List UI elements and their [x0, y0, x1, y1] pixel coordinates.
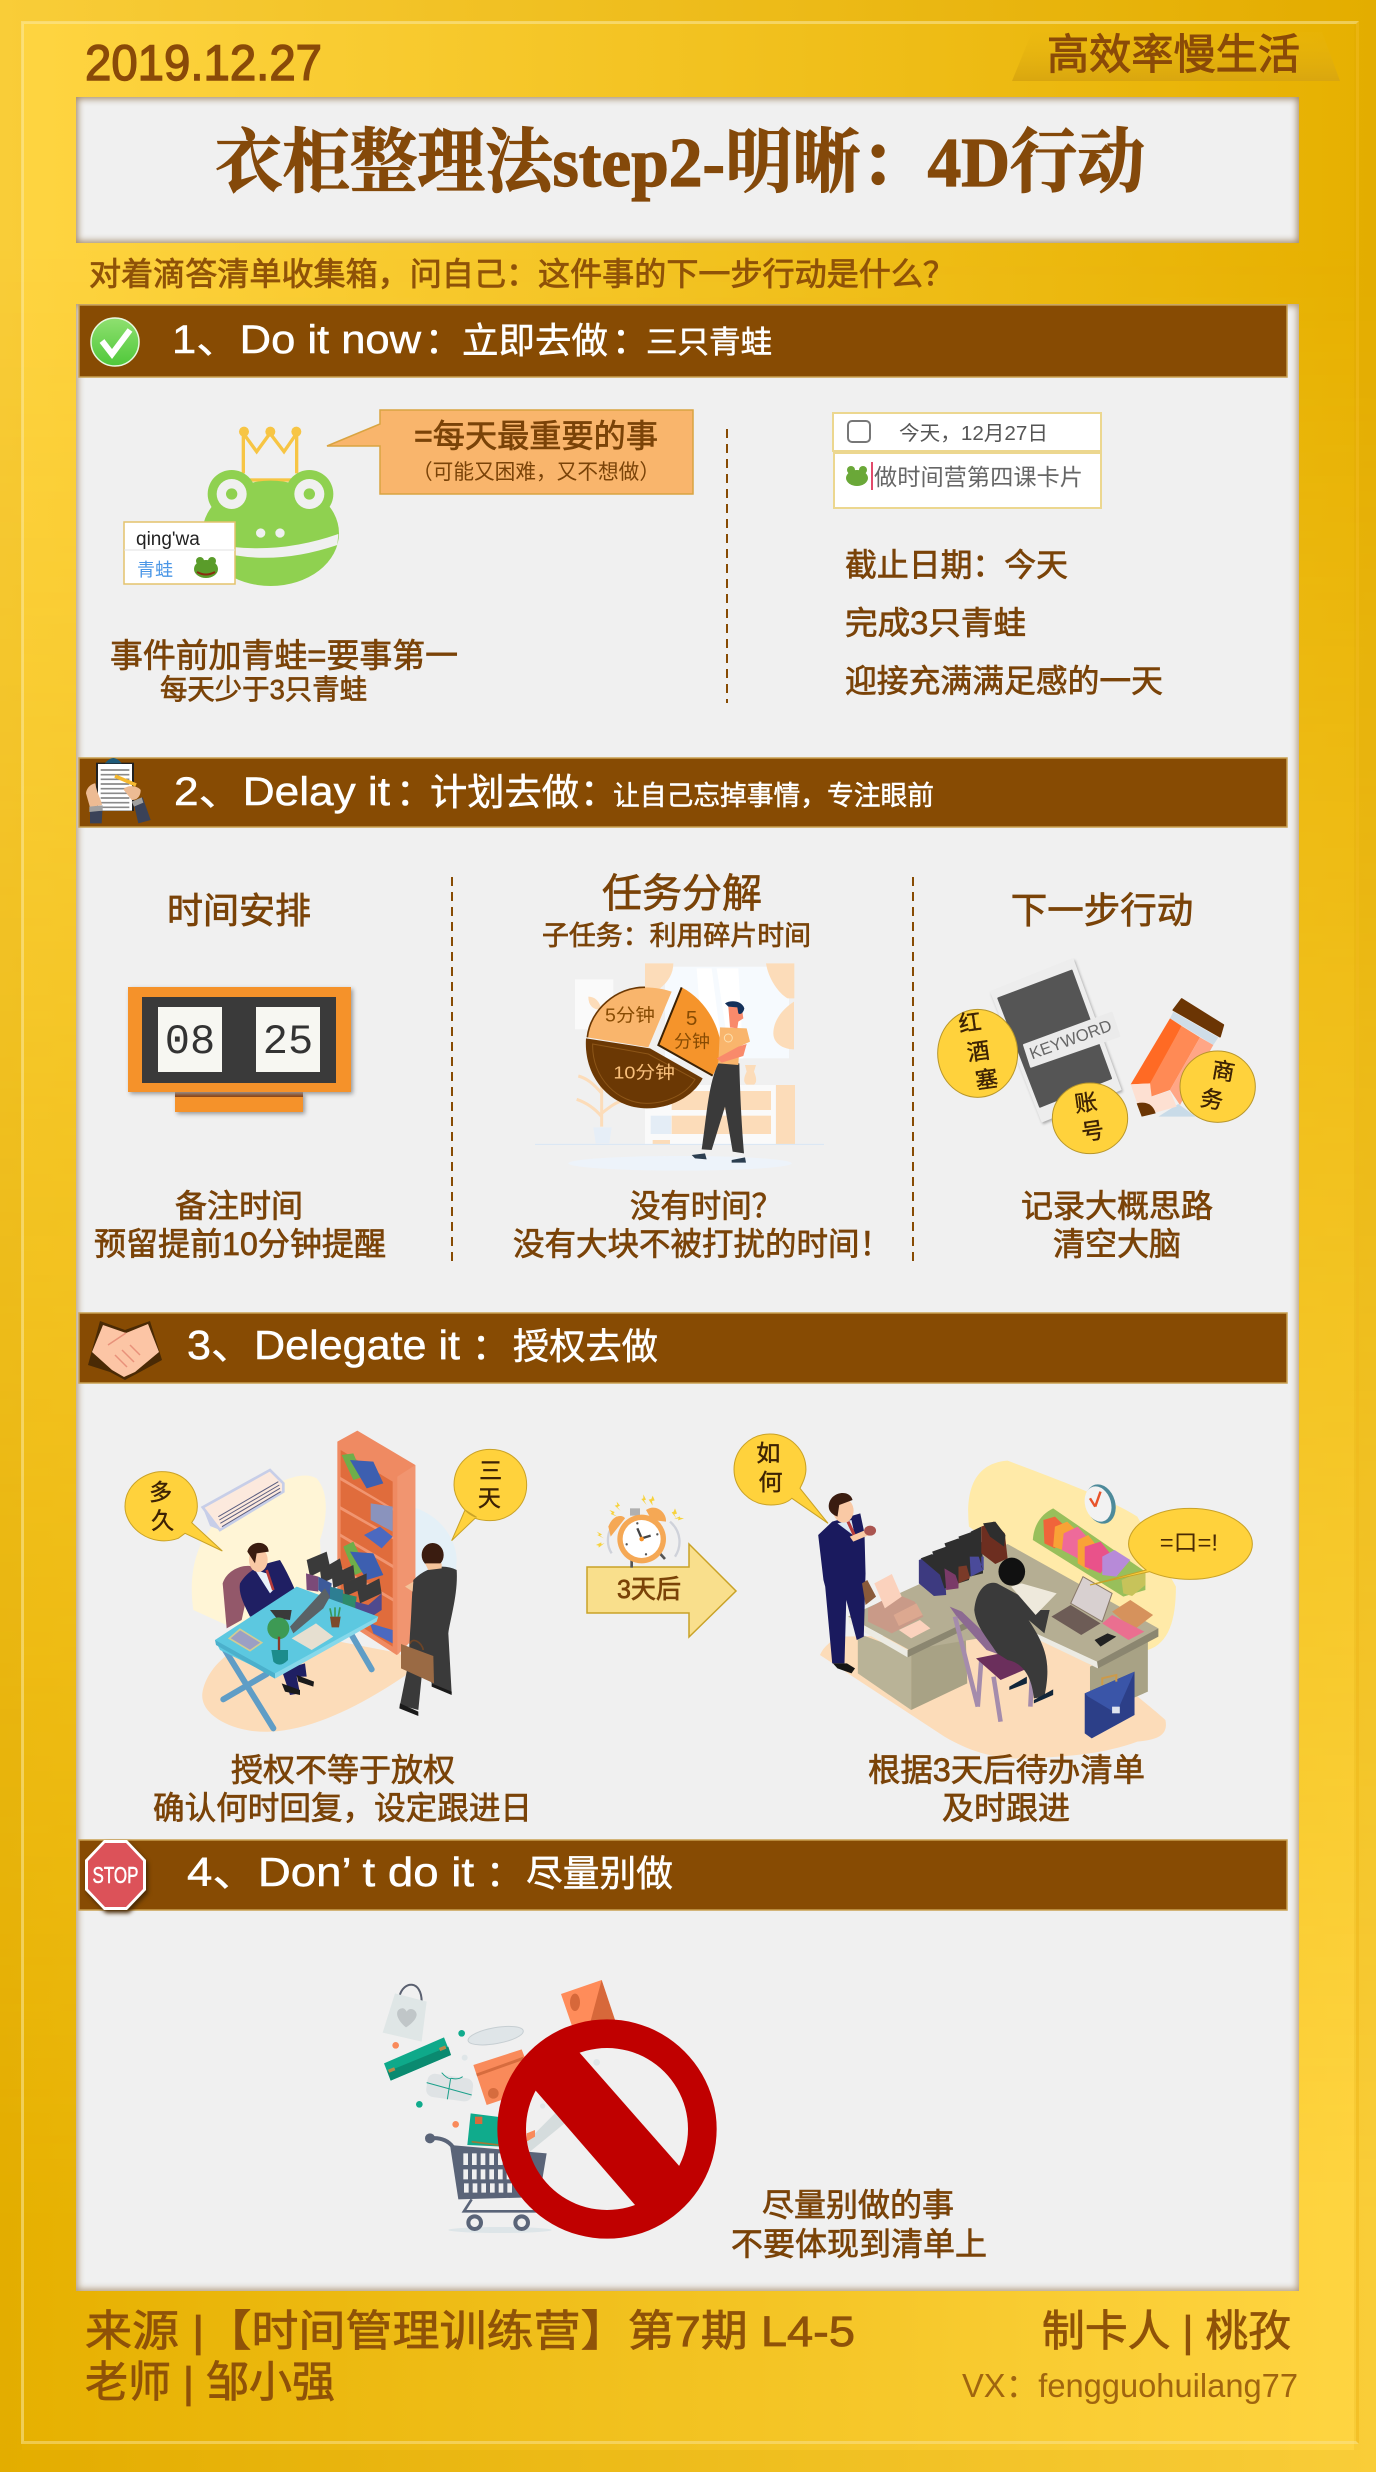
pie: 5 minutes orange: 5	[686, 1007, 697, 1030]
section 1 heading	[172, 318, 772, 362]
files on right desk	[919, 1522, 1008, 1596]
standing man	[818, 1493, 876, 1673]
backdrop blobs	[820, 1461, 1176, 1759]
section 4 heading: 尽量别做	[526, 1853, 673, 1894]
caption: note time	[94, 1188, 386, 1262]
icon: flip clock: 08	[165, 1018, 215, 1066]
text block: deadline: 迎接充满满足感的一天	[845, 663, 1163, 699]
icon: clipboard	[86, 758, 151, 823]
footer: credit	[962, 2308, 1298, 2404]
person	[692, 1001, 750, 1163]
section 1 heading: 立即去做	[462, 320, 608, 361]
caption: do not list: 不要体现到清单上	[731, 2226, 987, 2262]
bubble: how long: 多	[149, 1479, 172, 1505]
icon: stop sign: STOP	[92, 1862, 138, 1888]
caption: clear mind: 清空大脑	[1053, 1226, 1181, 1262]
floating items	[384, 1980, 615, 2152]
callout: most important thing: （可能又困难，又不想做）	[412, 461, 660, 484]
illustration: notebook, pencil, coins	[938, 958, 1255, 1154]
input box: qingwa: 青蛙	[137, 560, 173, 580]
coin: business: 商	[1210, 1056, 1237, 1086]
illustration: person holding pie chart	[535, 963, 824, 1171]
caption: delegate not abdicate: 确认何时回复，设定跟进日	[153, 1790, 532, 1826]
input box: qingwa: qing'wa	[136, 529, 200, 550]
caption: follow up: 根据3天后待办清单	[868, 1752, 1145, 1788]
icon: green check	[91, 318, 139, 366]
bubble: how: 何	[758, 1470, 783, 1496]
section 1 header bar	[79, 305, 1287, 377]
section 3 heading: 3、Delegate it	[187, 1322, 461, 1368]
coin: business	[1180, 1051, 1255, 1122]
caption: clear mind: 记录大概思路	[1021, 1188, 1213, 1224]
icon: flip clock	[128, 987, 351, 1112]
date: 2019.12.27	[85, 35, 322, 91]
section 2 heading: 计划去做	[430, 772, 579, 813]
pie: 5 minutes light	[587, 987, 672, 1047]
footer: credit: 制卡人 | 桃孜	[1042, 2308, 1291, 2356]
caption: do not list: 尽量别做的事	[762, 2187, 954, 2223]
callout: most important thing: =每天最重要的事	[414, 418, 658, 454]
icon: flip clock: 25	[263, 1018, 313, 1066]
laptop and books	[1051, 1577, 1153, 1647]
bubble: how	[734, 1434, 828, 1523]
task card: 做时间营第四课卡片	[874, 464, 1083, 490]
section 2 heading	[174, 770, 934, 814]
illustration: following up at office	[734, 1434, 1252, 1759]
caption: no time	[513, 1188, 891, 1262]
icon: small frog	[194, 557, 218, 578]
coin: business: 务	[1198, 1085, 1225, 1114]
section 4 heading: 4、Don’ t do it	[187, 1849, 475, 1895]
chair	[950, 1607, 1036, 1722]
subtitle question: 对着滴答清单收集箱，问自己：这件事的下一步行动是什么？	[89, 256, 955, 292]
backdrop blobs	[192, 1475, 457, 1732]
bubble: how: 如	[756, 1441, 780, 1467]
section 1 heading: ：	[425, 320, 461, 361]
pie: 10 minutes: 10分钟	[613, 1062, 675, 1082]
heading: next action: 下一步行动	[1011, 890, 1193, 931]
section 2 heading: ：	[396, 772, 433, 813]
icon: alarm clock	[596, 1494, 684, 1568]
blue desk	[215, 1587, 378, 1728]
arrow: three days later	[587, 1544, 736, 1637]
caption: note time: 预留提前10分钟提醒	[94, 1226, 386, 1262]
briefcase	[1085, 1672, 1135, 1738]
standing man	[399, 1543, 457, 1716]
caption: delegate not abdicate	[153, 1752, 532, 1826]
bubble: how long	[125, 1472, 222, 1551]
cart	[425, 2133, 552, 2233]
section 4 heading: ：	[486, 1853, 522, 1894]
section 1 heading: 三只青蛙	[646, 325, 772, 360]
task card: 今天，12月27日	[899, 422, 1048, 445]
footer: source and teacher	[85, 2308, 855, 2407]
caption: note time: 备注时间	[175, 1188, 303, 1224]
caption: follow up: 及时跟进	[942, 1790, 1070, 1826]
input box: qingwa	[124, 522, 235, 584]
caption: no time: 没有时间？	[630, 1188, 782, 1224]
bubble: how long: 久	[151, 1507, 174, 1533]
room background	[535, 963, 824, 1171]
heading: task breakdown: 子任务：利用碎片时间	[542, 921, 811, 951]
heading: task breakdown: 任务分解	[602, 872, 762, 916]
text block: deadline	[845, 547, 1163, 699]
bubble: surprised face: =口=!	[1160, 1530, 1218, 1556]
pie: 5 minutes orange	[658, 987, 721, 1076]
notebook	[990, 958, 1122, 1123]
L-shaped desk	[848, 1544, 1158, 1710]
icon: handshake	[88, 1321, 162, 1380]
pie: 5 minutes orange: 分钟	[674, 1031, 710, 1051]
fax machine	[868, 1574, 930, 1638]
caption: frog first: 每天少于3只青蛙	[160, 674, 367, 705]
caption: clear mind	[1021, 1188, 1213, 1262]
section 3 heading: ：	[472, 1326, 508, 1367]
notebook: KEYWORD	[1027, 1016, 1114, 1063]
panel: title background	[76, 97, 1299, 243]
coin: wine stopper: 塞	[974, 1065, 1000, 1094]
task card	[833, 413, 1101, 508]
section 2 heading: 2、Delay it	[174, 770, 390, 814]
pie: 10 minutes	[586, 1038, 703, 1108]
bookcase	[337, 1431, 415, 1655]
seated man	[223, 1543, 314, 1695]
seated man	[974, 1558, 1057, 1703]
title: 衣柜整理法step2-明晰：4D行动	[215, 125, 1145, 202]
caption: frog first: 事件前加青蛙=要事第一	[110, 637, 458, 674]
brand tag: 高效率慢生活	[1047, 31, 1300, 78]
coin: account	[1052, 1083, 1128, 1154]
section 3 heading: 授权去做	[513, 1326, 658, 1367]
illustration: crowned frog	[202, 427, 339, 586]
caption: delegate not abdicate: 授权不等于放权	[231, 1752, 455, 1788]
footer: credit: VX：fengguohuilang77	[962, 2367, 1298, 2404]
section 3 header bar	[79, 1313, 1287, 1383]
pencil	[1131, 999, 1223, 1117]
wall clock	[1081, 1481, 1120, 1527]
caption: no time: 没有大块不被打扰的时间！	[513, 1226, 891, 1262]
section 4 heading	[187, 1849, 673, 1895]
footer: source and teacher: 来源 |【时间管理训练营】第7期 L4-5	[85, 2308, 855, 2356]
divider: column 1	[451, 877, 453, 1262]
illustration: delegating at desk	[125, 1431, 527, 1732]
caption: frog first	[110, 637, 458, 705]
heading: task breakdown	[542, 872, 811, 951]
section 2 heading: ：	[580, 772, 617, 813]
section 1 heading: ：	[612, 320, 648, 361]
icon: stop sign	[85, 1840, 146, 1910]
illustration: shopping items	[383, 1980, 717, 2239]
bubble: surprised face	[1090, 1508, 1252, 1585]
coin: wine stopper	[938, 1008, 1018, 1097]
callout: most important thing	[327, 410, 693, 494]
pie: 5 minutes light: 5分钟	[605, 1005, 655, 1026]
bubble: three days: 天	[478, 1485, 501, 1511]
text block: deadline: 完成3只青蛙	[845, 605, 1026, 641]
coin: wine stopper: 酒	[965, 1037, 991, 1066]
coin: wine stopper: 红	[957, 1008, 983, 1037]
section 3 heading	[187, 1322, 658, 1368]
section 4 header bar	[79, 1840, 1287, 1910]
panel: content background	[76, 304, 1299, 2291]
footer: source and teacher: 老师 | 邹小强	[85, 2359, 335, 2407]
shopping bag	[383, 1985, 427, 2042]
icon: prohibition sign	[497, 2019, 717, 2239]
bubble: three days: 三	[479, 1457, 502, 1483]
bubble: three days	[452, 1449, 527, 1541]
divider: section 1	[726, 429, 728, 703]
divider: column 2	[912, 877, 914, 1262]
section 2 header bar	[79, 758, 1287, 827]
coin: account: 号	[1080, 1117, 1106, 1145]
files on desk	[306, 1552, 382, 1620]
caption: do not list	[731, 2187, 987, 2262]
caption: follow up	[868, 1752, 1145, 1826]
text block: deadline: 截止日期：今天	[845, 547, 1068, 583]
heading: time arrangement: 时间安排	[167, 890, 311, 931]
section 2 heading: 让自己忘掉事情，专注眼前	[613, 781, 934, 811]
air conditioner	[203, 1470, 283, 1530]
arrow: three days later: 3天后	[617, 1574, 681, 1604]
coin: account: 账	[1073, 1088, 1099, 1117]
section 1 heading: 1、Do it now	[172, 318, 421, 362]
wall shelf of books	[1033, 1508, 1145, 1597]
